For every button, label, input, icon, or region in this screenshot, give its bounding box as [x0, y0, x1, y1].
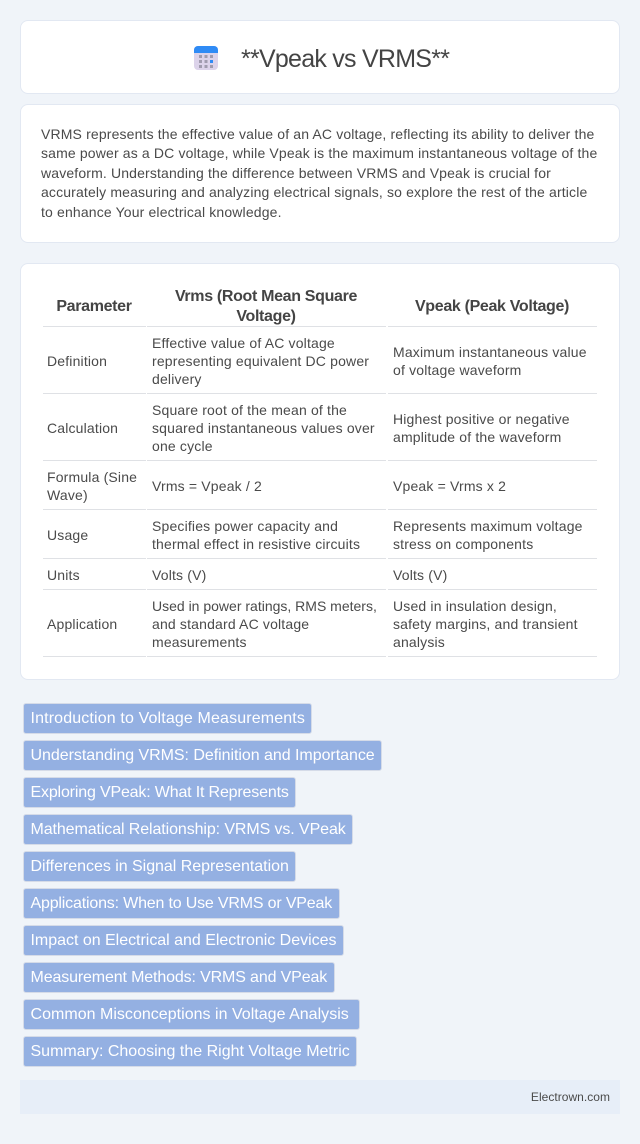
button: mathematical relationship: [23, 814, 353, 845]
row: calculation: one cycle: [152, 438, 213, 454]
row: definition: Maximum instantaneous value: [393, 344, 587, 360]
row: application: Used in insulation design,: [393, 598, 557, 614]
intro text panel: accurately measuring and analyzing electrical signals, so explore the rest of the article: [41, 184, 587, 200]
row: calculation: Calculation: [47, 420, 118, 436]
row: usage: Represents maximum voltage: [393, 518, 583, 534]
row: calculation: amplitude of the waveform: [393, 429, 561, 445]
button: measurement methods: [23, 962, 335, 993]
title: **Vpeak vs VRMS**: [241, 45, 449, 73]
intro text panel: same power as a DC voltage, while Vpeak is the maximum instantaneous voltage of the: [41, 145, 597, 161]
row: definition: representing equivalent DC power: [152, 353, 369, 369]
intro text panel: [20, 104, 620, 243]
row: application: Application: [47, 616, 117, 632]
table header: Parameter: [56, 298, 132, 315]
row: calculation: squared instantaneous values over: [152, 420, 375, 436]
intro text panel: VRMS represents the effective value of an AC voltage, reflecting its ability to deliver the: [41, 126, 594, 142]
row: definition: delivery: [152, 371, 202, 387]
button: understanding VRMS: Understanding VRMS: Definition and Importance: [30, 747, 375, 764]
row: units: Volts (V): [393, 567, 447, 583]
button: exploring VPeak: Exploring VPeak: What It Represents: [30, 784, 289, 801]
table header: Vrms (Root Mean Square: [175, 288, 357, 305]
intro text panel: waveform. Understanding the difference between VRMS and Vpeak is crucial for: [41, 164, 551, 180]
button: impact: Impact on Electrical and Electronic Devices: [30, 932, 336, 949]
row: usage: stress on components: [393, 536, 533, 552]
row: application: and standard AC voltage: [152, 616, 309, 632]
button: summary: [23, 1036, 357, 1067]
header panel: [20, 20, 620, 94]
row: units: [47, 567, 447, 583]
table header: [56, 288, 569, 325]
row: units: Volts (V): [152, 567, 206, 583]
row: usage: thermal effect in resistive circuits: [152, 536, 360, 552]
row: definition: [47, 335, 587, 387]
button: misconceptions: Common Misconceptions in Voltage Analysis: [30, 1006, 349, 1023]
button: measurement methods: Measurement Methods: VRMS and VPeak: [30, 969, 327, 986]
intro text panel: to enhance Your electrical knowledge.: [41, 204, 282, 220]
row: application: Used in power ratings, RMS meters,: [152, 598, 377, 614]
table header: Voltage): [236, 308, 296, 325]
button: mathematical relationship: Mathematical Relationship: VRMS vs. VPeak: [30, 821, 346, 838]
row: formula: Wave): [47, 487, 88, 503]
row: formula: Formula (Sine: [47, 469, 137, 485]
button: differences: Differences in Signal Representation: [30, 858, 289, 875]
row: formula: Vrms = Vpeak / 2: [152, 478, 262, 494]
button: introduction: [23, 703, 312, 734]
button: summary: Summary: Choosing the Right Voltage Metric: [30, 1043, 350, 1060]
button: understanding VRMS: [23, 740, 382, 771]
button: applications: [23, 888, 340, 919]
button: introduction: Introduction to Voltage Measurements: [30, 710, 305, 727]
button: differences: [23, 851, 296, 882]
row: usage: [47, 518, 583, 552]
row: definition: Effective value of AC voltage: [152, 335, 335, 351]
row: application: analysis: [393, 634, 445, 650]
comparison table panel: [20, 263, 620, 680]
row: formula: [47, 469, 506, 503]
row: application: measurements: [152, 634, 247, 650]
button: impact: [23, 925, 344, 956]
row: definition: Definition: [47, 353, 107, 369]
footer bar: [20, 1080, 620, 1114]
row: calculation: Highest positive or negative: [393, 411, 570, 427]
row: formula: Vpeak = Vrms x 2: [393, 478, 506, 494]
table header: Vpeak (Peak Voltage): [415, 298, 569, 315]
icon: calendar: [194, 46, 218, 70]
row: definition: of voltage waveform: [393, 362, 522, 378]
row: usage: Usage: [47, 527, 88, 543]
button: applications: Applications: When to Use VRMS or VPeak: [30, 895, 332, 912]
row: units: Units: [47, 567, 80, 583]
footer credit: Electrown.com: [531, 1090, 610, 1104]
row: application: [47, 598, 578, 650]
row: application: safety margins, and transient: [393, 616, 578, 632]
row: calculation: [47, 402, 570, 454]
button: exploring VPeak: [23, 777, 296, 808]
topic button list: [23, 703, 382, 1067]
row: calculation: Square root of the mean of the: [152, 402, 347, 418]
row: usage: Specifies power capacity and: [152, 518, 338, 534]
button: misconceptions: [23, 999, 360, 1030]
